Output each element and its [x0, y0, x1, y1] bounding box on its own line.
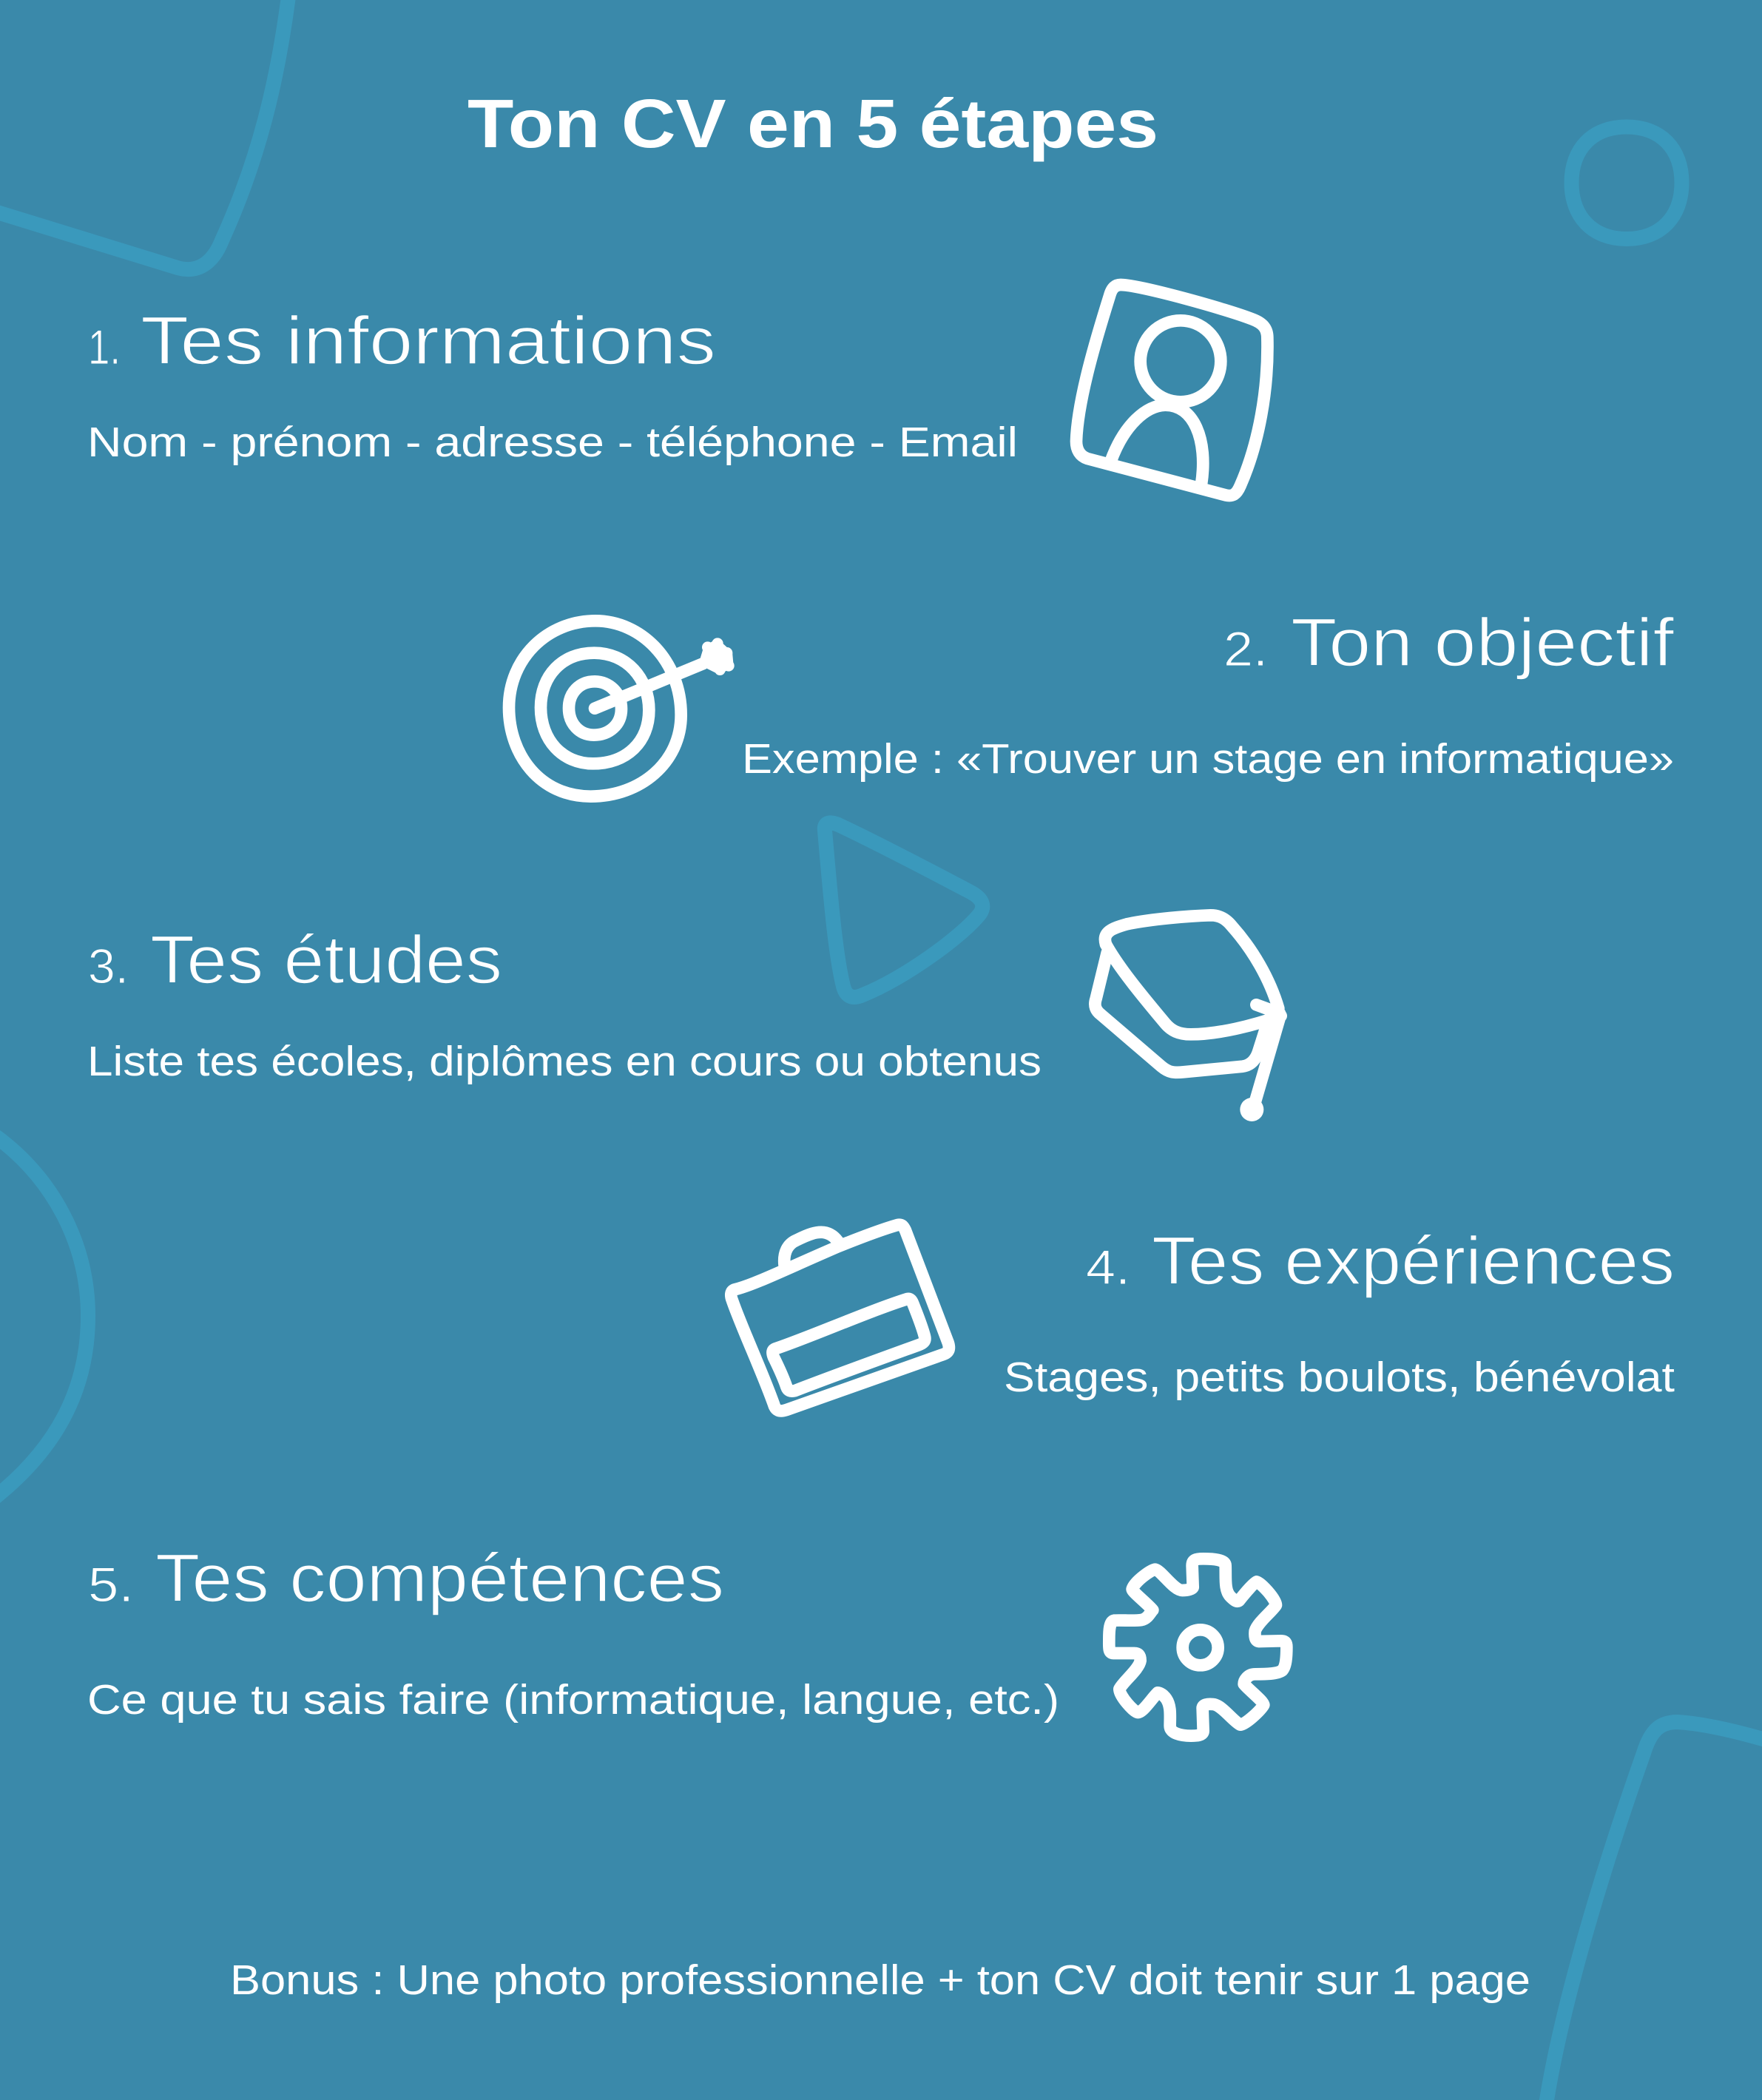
heading: step 1: 1.	[88, 320, 121, 374]
heading: step 4: 4.	[1086, 1240, 1130, 1294]
panel: step 4	[731, 1223, 1675, 1411]
title: Ton CV en 5 étapes	[467, 85, 1158, 162]
icon: portrait card	[1076, 285, 1267, 496]
panel: step 3	[87, 915, 1285, 1121]
panel: step 5	[87, 1541, 1286, 1736]
heading: step 1: Tes informations	[141, 303, 716, 379]
heading: step 2: Ton objectif	[1291, 605, 1674, 681]
heading: step 3: 3.	[88, 939, 129, 993]
decoration: centre triangle	[825, 823, 982, 997]
text: step 3 details: Liste tes écoles, diplômes en cours ou obtenus	[87, 1038, 1042, 1085]
icon: target with arrow	[509, 621, 735, 797]
icon: graduation cap	[1095, 915, 1285, 1121]
heading: step 5: 5.	[88, 1557, 134, 1612]
text: step 5 details: Ce que tu sais faire (informatique, langue, etc.)	[87, 1676, 1059, 1723]
text: step 2 details: Exemple : «Trouver un stage en informatique»	[742, 735, 1674, 783]
panel: step 1	[87, 285, 1267, 496]
decoration: bottom-right rounded shape	[1546, 1722, 1762, 2100]
text: step 1 details: Nom - prénom - adresse - téléphone - Email	[87, 419, 1018, 466]
heading: step 3: Tes études	[150, 922, 502, 998]
heading: step 5: Tes compétences	[155, 1541, 724, 1616]
decoration: top-right ring	[1571, 127, 1682, 239]
text: bonus note: Bonus : Une photo professionnelle + ton CV doit tenir sur 1 page	[230, 1956, 1530, 2004]
decoration: left arc	[0, 1134, 88, 1499]
decoration: top-left rounded shape	[0, 0, 288, 269]
icon: gear	[1109, 1559, 1286, 1736]
heading: step 2: 2.	[1223, 621, 1268, 676]
icon: briefcase	[731, 1225, 949, 1411]
panel: step 2	[509, 605, 1674, 797]
heading: step 4: Tes expériences	[1152, 1223, 1675, 1299]
text: step 4 details: Stages, petits boulots, bénévolat	[1004, 1354, 1675, 1401]
